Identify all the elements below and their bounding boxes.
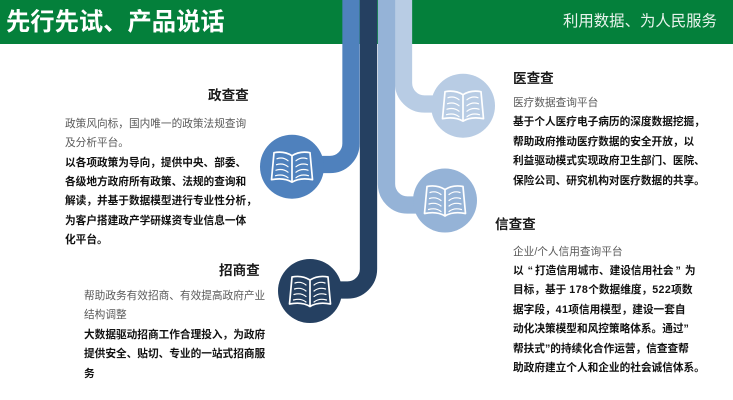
text: 招商查 description: 帮助政务有效招商、有效提高政府产业 xyxy=(84,290,265,302)
text: 信查查 description: 企业/个人信用查询平台 xyxy=(513,246,623,258)
text: 政查查 description: 化平台。 xyxy=(65,234,108,246)
text: 医查查 description: 利益驱动模式实现政府卫生部门、医院、 xyxy=(513,155,705,167)
title: 先行先试、产品说话 xyxy=(6,9,225,36)
header bar xyxy=(0,0,733,44)
text: 政查查 description: 以各项政策为导向，提供中央、部委、 xyxy=(65,157,246,169)
heading: 医查查: 医查查 xyxy=(513,71,554,86)
text: 医查查 description xyxy=(513,96,705,187)
icon: book light xyxy=(442,91,484,121)
text: 政查查 description: 各级地方政府所有政策、法规的查询和 xyxy=(65,176,246,188)
text: 信查查 description: 以 “打造信用城市、建设信用社会” 为 xyxy=(513,265,696,277)
branch: light blue xyxy=(404,0,495,138)
text: 政查查 description: 为客户搭建政产学研媒资专业信息一体 xyxy=(65,215,246,227)
text: 政查查 description xyxy=(65,118,257,246)
icon: book blue xyxy=(272,152,312,182)
icon: book navy xyxy=(290,276,330,306)
text: 招商查 description: 务 xyxy=(84,368,95,380)
branch: navy xyxy=(278,0,368,323)
icon: book medium xyxy=(424,186,466,216)
heading: 政查查: 政查查 xyxy=(208,88,249,102)
text: 招商查 description: 大数据驱动招商工作合理投入，为政府 xyxy=(84,329,265,341)
text: 信查查 description: 帮扶式”的持续化合作运营，信查查帮 xyxy=(513,343,689,355)
text: 招商查 description: 提供安全、贴切、专业的一站式招商服 xyxy=(84,348,265,360)
text: 医查查 description: 帮助政府推动医疗数据的安全开放，以 xyxy=(513,136,694,148)
text: 政查查 description: 解读，并基于数据模型进行专业性分析， xyxy=(65,195,257,207)
text: 信查查 description: 动化决策模型和风控策略体系。通过” xyxy=(513,323,689,335)
text: 信查查 description xyxy=(513,246,705,374)
branch: blue xyxy=(260,0,351,199)
branch: medium blue xyxy=(386,0,477,232)
text: 医查查 description: 保险公司、研究机构对医疗数据的共享。 xyxy=(513,175,705,187)
text: 招商查 description: 结构调整 xyxy=(84,309,127,321)
text: 信查查 description: 助政府建立个人和企业的社会诚信体系。 xyxy=(513,362,705,374)
text: 政查查 description: 政策风向标，国内唯一的政策法规查询 xyxy=(65,118,246,130)
text: 医查查 description: 医疗数据查询平台 xyxy=(513,97,598,109)
heading: 信查查: 信查查 xyxy=(495,217,536,232)
subtitle: 利用数据、为人民服务 xyxy=(563,13,717,30)
text: 招商查 description xyxy=(84,290,265,380)
text: 政查查 description: 及分析平台。 xyxy=(65,137,129,149)
text: 信查查 description: 目标，基于 178个数据维度，522项数 xyxy=(513,284,692,296)
heading: 招商查: 招商查 xyxy=(219,263,260,278)
text: 信查查 description: 据字段，41项信用模型，建设一套自 xyxy=(513,304,686,316)
text: 医查查 description: 基于个人医疗电子病历的深度数据挖掘， xyxy=(513,116,705,128)
